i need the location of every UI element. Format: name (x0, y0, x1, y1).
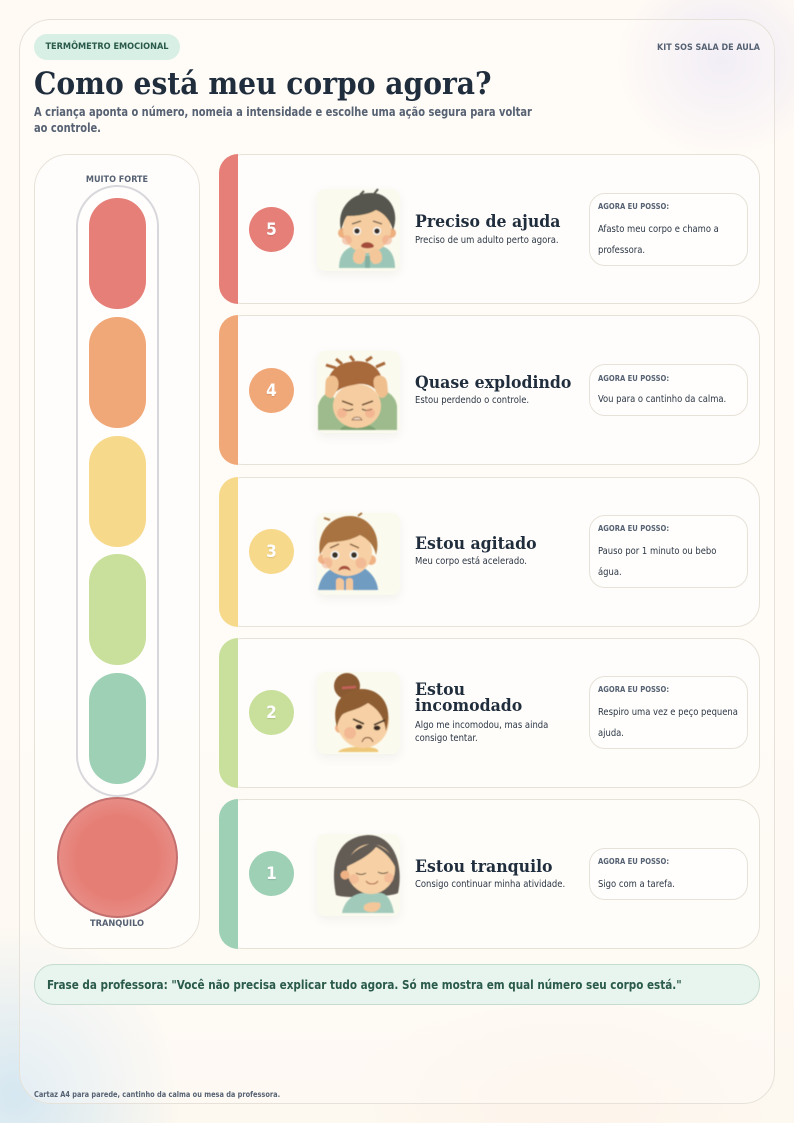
row 3 action label: AGORA EU POSSO: (598, 524, 669, 533)
footer note: Cartaz A4 para parede, cantinho da calma ou mesa da professora. (34, 1090, 280, 1099)
icon: worried boy biting nails (338, 188, 396, 269)
row 2 action box (589, 676, 748, 749)
header (34, 34, 760, 135)
row 5 picture background (317, 189, 400, 271)
row 1 number: 1 (266, 864, 277, 884)
row 2 title (415, 680, 522, 716)
badge: termômetro emocional: TERMÔMETRO EMOCIONAL (45, 42, 169, 52)
row 3 number (249, 529, 294, 574)
row 1 action text: Sigo com a tarefa. (598, 879, 675, 890)
row 4 action box (589, 364, 748, 416)
row 4 number: 4 (266, 381, 277, 401)
row 2 action text (598, 707, 738, 739)
row 4 card (219, 315, 760, 465)
level 4 segment (89, 317, 146, 428)
row 4 picture background (317, 351, 400, 433)
row 1 description: Consigo continuar minha atividade. (415, 879, 565, 890)
row 4 action text: Vou para o cantinho da calma. (598, 394, 726, 405)
icon: anxious boy in hoodie (318, 512, 379, 591)
row 4 title: Quase explodindo (415, 373, 571, 393)
thermometer bulb (57, 797, 178, 918)
row 3 action text: água. (598, 567, 622, 578)
row 5 description: Preciso de um adulto perto agora. (415, 235, 559, 246)
level 5 segment (89, 198, 146, 309)
row 3 description: Meu corpo está acelerado. (415, 556, 527, 567)
thermometer tube (76, 185, 159, 797)
row 2 title: incomodado (415, 696, 522, 716)
row 4 action label: AGORA EU POSSO: (598, 374, 669, 383)
row 1 action box (589, 848, 748, 900)
row 2 action text: ajuda. (598, 728, 624, 739)
row 3 title: Estou agitado (415, 534, 537, 554)
teacher quote (34, 964, 760, 1005)
row 2 title: Estou (415, 680, 465, 700)
kit label: KIT SOS SALA DE AULA (657, 43, 760, 53)
row 3 action box (589, 515, 748, 588)
row 3 action text: Pauso por 1 minuto ou bebo (598, 546, 716, 557)
row 1 title: Estou tranquilo (415, 857, 553, 877)
row 2 picture background (317, 672, 400, 754)
subtitle: ao controle. (34, 121, 101, 135)
row 5 action text: professora. (598, 245, 645, 256)
row 1 number (249, 851, 294, 896)
row 3 action text (598, 546, 716, 578)
row 3 card (219, 477, 760, 627)
row 2 action text: Respiro uma vez e peço pequena (598, 707, 738, 718)
row 3 number: 3 (266, 542, 277, 562)
row 5 title: Preciso de ajuda (415, 212, 560, 232)
row 2 card (219, 638, 760, 788)
row 5 action label: AGORA EU POSSO: (598, 202, 669, 211)
icon: boy holding head (318, 354, 398, 431)
row 2 description: Algo me incomodou, mas ainda consigo tentar. (415, 720, 548, 744)
badge: termômetro emocional (34, 34, 180, 60)
level 3 segment (89, 436, 146, 547)
level 1 segment (89, 673, 146, 784)
row 2 action label: AGORA EU POSSO: (598, 685, 669, 694)
teacher quote text: Frase da professora: "Você não precisa explicar tudo agora. Só me mostra em qual número seu corpo está." (47, 977, 682, 992)
row 5 action box (589, 193, 748, 266)
icon: calm girl with hand on chest (333, 834, 400, 914)
row 3 picture background (317, 513, 400, 595)
row 1 card (219, 799, 760, 949)
row 5 card (219, 154, 760, 304)
thermometer bottom label: TRANQUILO (90, 918, 144, 929)
row 2 number (249, 690, 294, 735)
subtitle (34, 105, 532, 135)
row 4 number (249, 368, 294, 413)
row 5 action text: Afasto meu corpo e chamo a (598, 224, 719, 235)
row 2 number: 2 (266, 703, 277, 723)
title: Como está meu corpo agora? (34, 66, 492, 102)
row 5 number: 5 (266, 220, 277, 240)
subtitle: A criança aponta o número, nomeia a intensidade e escolhe uma ação segura para voltar (34, 105, 532, 119)
icon: annoyed girl with bun (333, 672, 390, 753)
row 1 action label: AGORA EU POSSO: (598, 857, 669, 866)
row 5 number (249, 207, 294, 252)
panel: thermometer (34, 154, 200, 949)
row 1 picture background (317, 834, 400, 916)
thermometer top label: MUITO FORTE (86, 175, 148, 185)
level 2 segment (89, 554, 146, 665)
row 4 description: Estou perdendo o controle. (415, 395, 529, 406)
row 5 action text (598, 224, 719, 256)
